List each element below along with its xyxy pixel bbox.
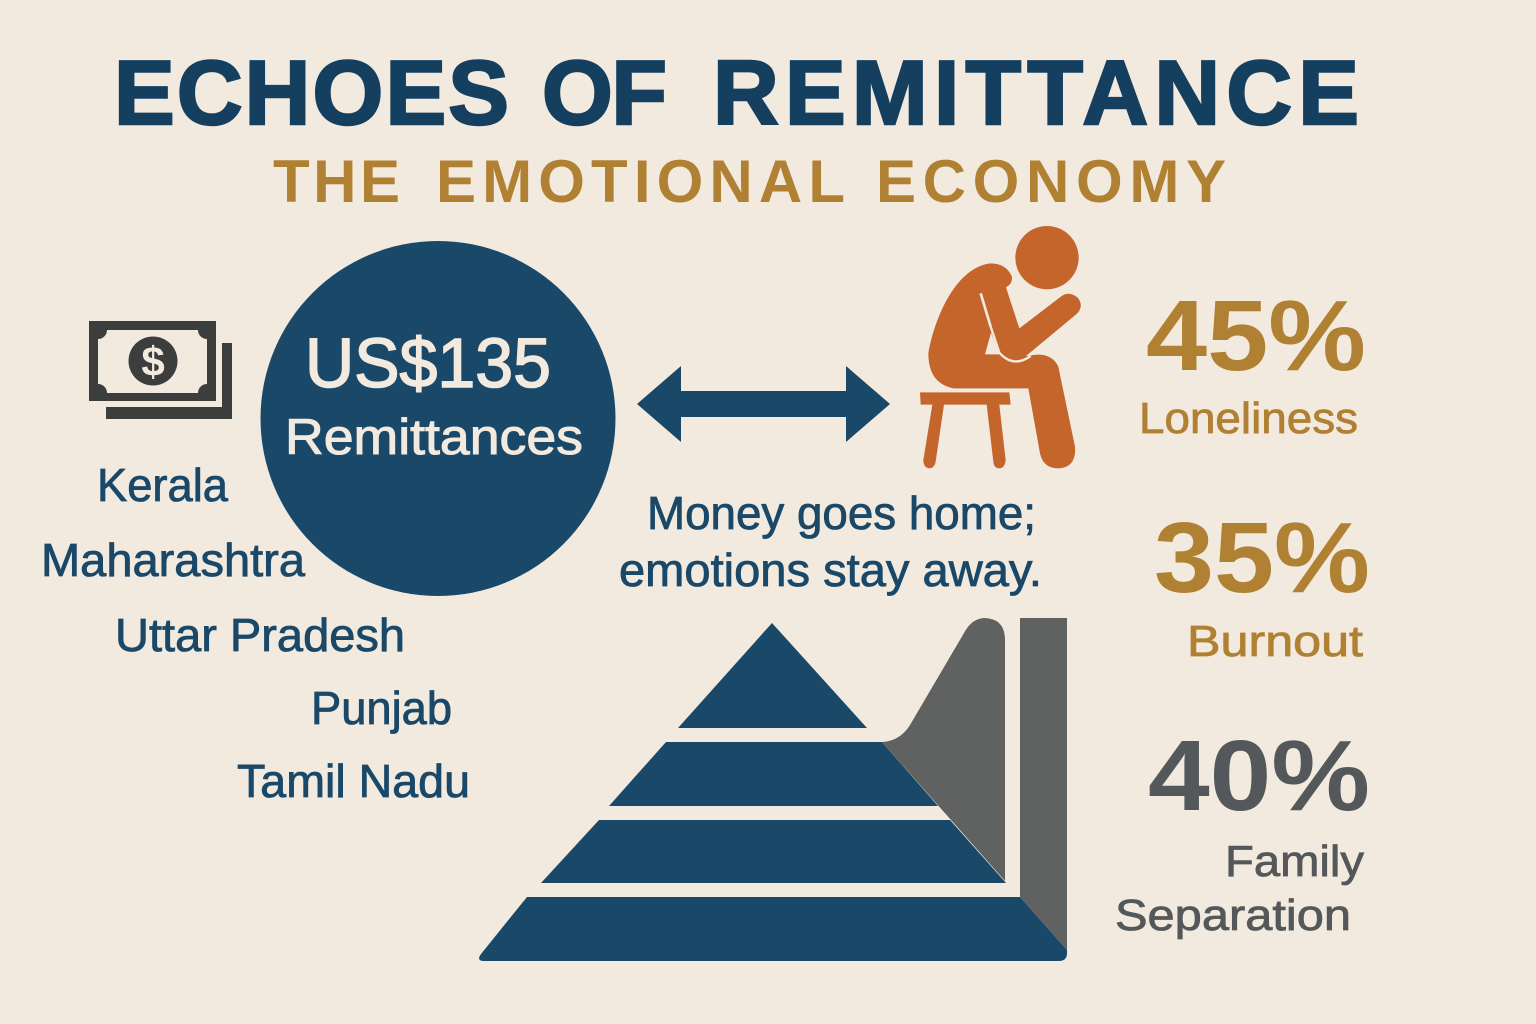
tagline: Money goes home; [647, 487, 1036, 539]
icon: banknotes [89, 321, 232, 419]
subtitle: ECONOMY [876, 148, 1226, 215]
stat: family separation: Separation [1115, 891, 1351, 940]
subtitle: THE [273, 148, 400, 215]
pyramid tier 1 [678, 623, 867, 728]
icon: seated person with head bowed [920, 226, 1081, 468]
state: Punjab: Punjab [311, 682, 452, 734]
stat: burnout: Burnout [1187, 617, 1363, 666]
stat: loneliness [1139, 280, 1366, 443]
state: Uttar Pradesh: Uttar Pradesh [115, 609, 405, 661]
subtitle [273, 148, 1226, 215]
stat: family separation: Family [1225, 837, 1364, 886]
state: Kerala: Kerala [97, 459, 228, 511]
state list [41, 459, 470, 807]
title: OF [542, 43, 667, 144]
tagline [619, 487, 1042, 596]
state: Tamil Nadu: Tamil Nadu [237, 755, 470, 807]
subtitle: EMOTIONAL [436, 148, 845, 215]
stat: family separation: 40% [1148, 720, 1370, 832]
pyramid tier 3 [541, 820, 1006, 883]
stat: burnout [1154, 502, 1370, 666]
pyramid chart [479, 618, 1067, 961]
state: Maharashtra: Maharashtra [41, 534, 305, 586]
pyramid shadow outer [1020, 618, 1067, 950]
stat: burnout: 35% [1154, 502, 1370, 614]
pyramid tier 2 [609, 742, 938, 806]
stat: family separation [1115, 720, 1370, 940]
arrow: two-way link between money and emotion [637, 366, 890, 442]
title [114, 43, 1359, 144]
icon: banknotes: $ [141, 338, 165, 385]
title: ECHOES [114, 43, 509, 144]
panel: remittances circle [260, 241, 616, 596]
remittance label: Remittances [285, 409, 583, 465]
remittance amount: US$135 [305, 324, 551, 402]
pyramid tier 4 [479, 897, 1067, 961]
stat: loneliness: Loneliness [1139, 394, 1358, 443]
stat: loneliness: 45% [1146, 280, 1366, 392]
tagline: emotions stay away. [619, 544, 1042, 596]
title: REMITTANCE [713, 43, 1359, 144]
pyramid shadow inner [882, 618, 1005, 881]
